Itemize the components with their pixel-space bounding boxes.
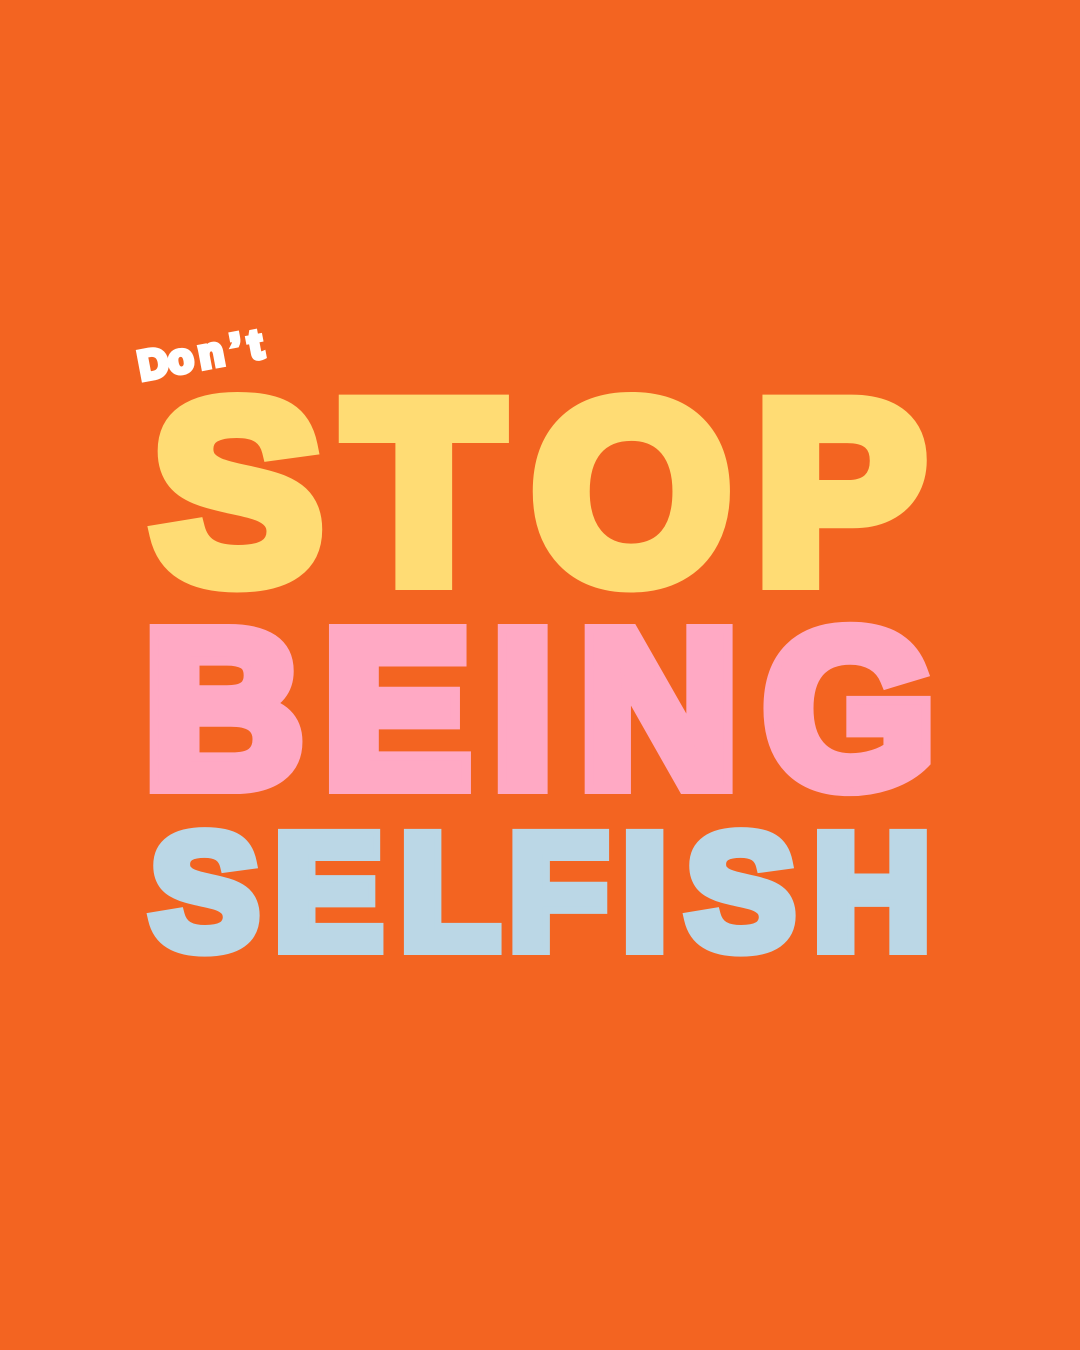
headline word: STOP: STOP bbox=[152, 350, 925, 635]
headline word: SELFISH: SELFISH bbox=[150, 800, 931, 983]
headline word: BEING: BEING bbox=[144, 585, 935, 832]
small rotated word: Don't: Don’t bbox=[134, 320, 267, 389]
